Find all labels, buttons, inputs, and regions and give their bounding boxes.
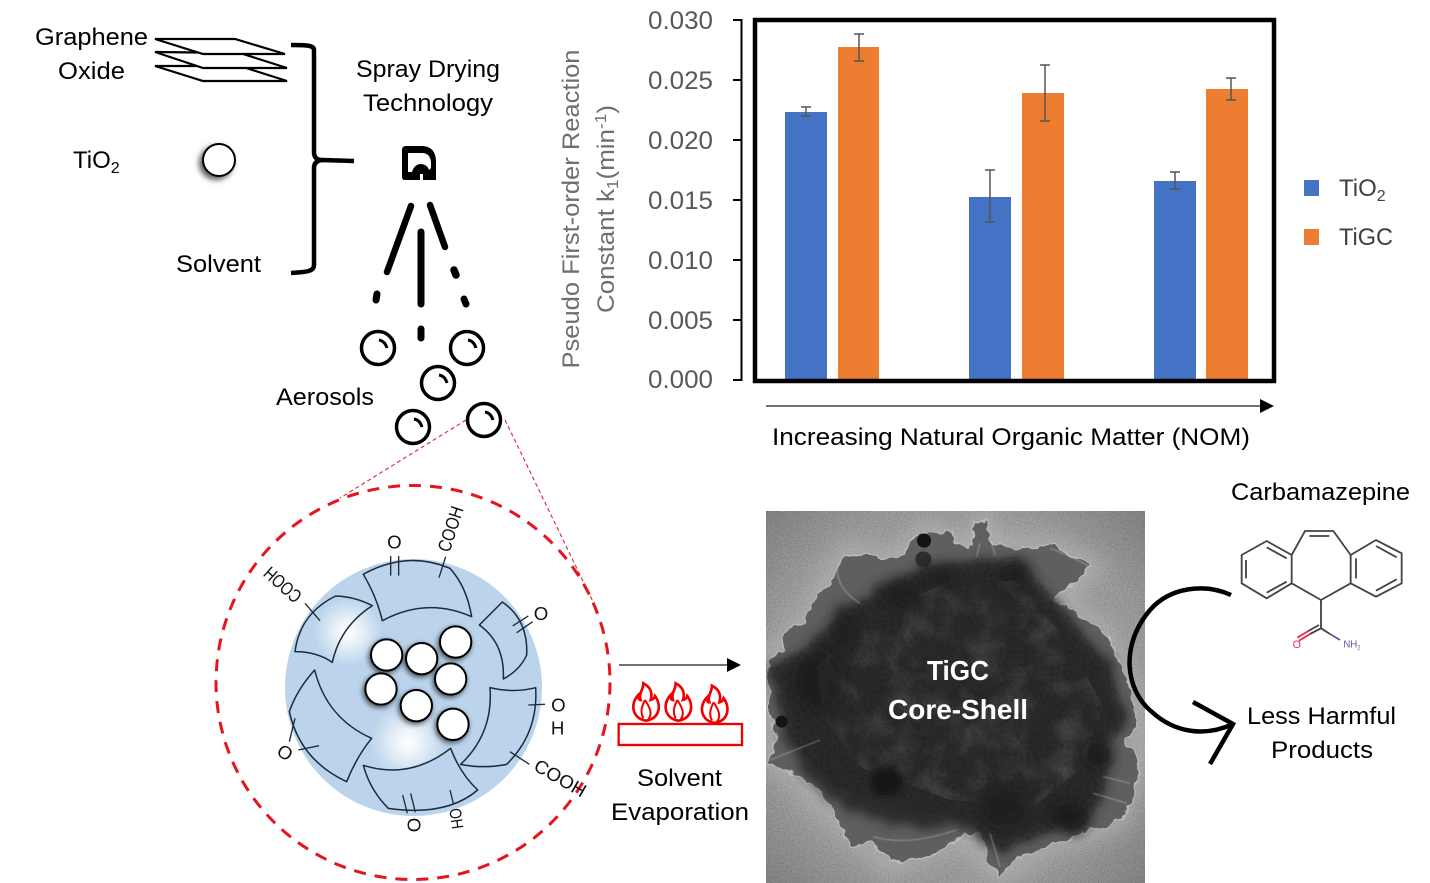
- y tick labels: 0.000: [648, 366, 713, 394]
- icon: TiO2 particle: [203, 144, 235, 176]
- micrograph: TiGC core-shell: [766, 511, 1145, 883]
- functional group labels: OH: [445, 807, 467, 830]
- heading: Spray Drying Technology: Technology: [363, 90, 493, 117]
- plot frame: [755, 20, 1274, 381]
- y tick labels: 0.030: [648, 7, 713, 35]
- thin graphene outer sheets: [768, 520, 1140, 875]
- bright halo: [768, 522, 1140, 875]
- arrow: to evaporation: [619, 658, 741, 672]
- label: Graphene Oxide: Graphene: [35, 24, 148, 51]
- y tick labels: 0.025: [648, 67, 713, 95]
- icon: flames and heater: [619, 683, 742, 745]
- y axis and ticks: [733, 20, 742, 380]
- functional group labels: COOH: [433, 504, 468, 554]
- bars TiO2: [785, 112, 1196, 380]
- legend: TiGC: [1339, 224, 1393, 251]
- icon: graphene oxide sheets: [155, 39, 287, 81]
- brace grouping inputs: [291, 45, 354, 273]
- label: Carbamazepine: Carbamazepine: [1231, 479, 1410, 506]
- label: Solvent: Solvent: [176, 251, 261, 278]
- icon: carbamazepine molecule: 2: [1357, 645, 1361, 651]
- y axis title: Constant k: [593, 198, 620, 313]
- label: TiO2: 2: [111, 160, 120, 177]
- y axis title: 1: [605, 179, 622, 189]
- label: Solvent Evaporation: Solvent: [637, 765, 722, 792]
- icon: carbamazepine molecule: O: [1293, 639, 1301, 651]
- y axis title: (min: [593, 129, 620, 179]
- label: Less Harmful Products: [1247, 703, 1396, 764]
- y axis title: Pseudo First-order Reaction: [558, 50, 585, 368]
- icon: aerosol bubbles: [362, 332, 500, 444]
- functional group labels: O: [403, 818, 424, 832]
- TiO2 core particles: [365, 626, 471, 740]
- icon: spray nozzle: [402, 146, 436, 180]
- label: Less Harmful Products: Products: [1271, 737, 1373, 764]
- label: Solvent Evaporation: Evaporation: [611, 799, 749, 826]
- label: Graphene Oxide: Oxide: [58, 58, 125, 85]
- functional group labels: O: [387, 531, 402, 552]
- y tick labels: 0.005: [648, 307, 713, 335]
- icon: carbamazepine molecule: [1242, 531, 1402, 651]
- legend: [1304, 175, 1393, 251]
- icon: carbamazepine molecule: NH: [1343, 640, 1357, 651]
- functional group labels: O: [534, 603, 548, 624]
- heading: Spray Drying Technology: [356, 56, 500, 117]
- functional group labels: O: [273, 740, 297, 765]
- y tick labels: 0.015: [648, 187, 713, 215]
- y tick labels: 0.010: [648, 247, 713, 275]
- y axis title: ): [593, 105, 620, 114]
- y tick labels: [648, 7, 713, 394]
- noise texture: [766, 511, 1145, 883]
- label: TiGC Core-Shell: Core-Shell: [888, 694, 1028, 725]
- legend: 2: [1377, 188, 1386, 205]
- label: TiGC Core-Shell: [888, 655, 1028, 725]
- lighter mottled patches: [817, 580, 1103, 807]
- label: Less Harmful Products: Less Harmful: [1247, 703, 1396, 730]
- x axis label: Increasing Natural Organic Matter (NOM): [772, 424, 1250, 451]
- y axis title: -1: [593, 114, 610, 129]
- label: Graphene Oxide: [35, 24, 148, 85]
- bright sheet folds: [770, 543, 1130, 867]
- graphene shell segments: [289, 560, 536, 810]
- bars TiGC: [838, 47, 1248, 380]
- functional group labels: [260, 504, 590, 832]
- functional group labels: COOH: [530, 755, 590, 801]
- heading: Spray Drying Technology: Spray Drying: [356, 56, 500, 83]
- dark core: [770, 557, 1127, 853]
- functional group labels: O: [551, 695, 566, 716]
- label: TiO2: TiO: [73, 147, 111, 174]
- legend: TiO: [1339, 175, 1377, 202]
- y tick labels: 0.020: [648, 127, 713, 155]
- arrow: increasing NOM: [766, 399, 1274, 413]
- label: Solvent Evaporation: [611, 765, 749, 826]
- zoom circle: particle cross-section: [216, 486, 610, 880]
- label: TiGC Core-Shell: TiGC: [927, 655, 989, 686]
- functional group labels: COOH: [260, 563, 306, 607]
- error bars: [801, 34, 1236, 222]
- core-shell particle: [260, 504, 590, 832]
- bar chart: rate constants: [558, 7, 1393, 394]
- label: Aerosols: Aerosols: [276, 384, 374, 411]
- dark nanoparticles and agglomerates: [776, 534, 1112, 830]
- fine speckle: [770, 557, 1127, 853]
- y axis title: [558, 50, 622, 368]
- icon: spray droplets: [376, 205, 466, 338]
- zoom lines: [340, 420, 598, 612]
- functional group labels: H: [551, 717, 564, 738]
- arrow: reaction cycle: [1130, 588, 1233, 764]
- functional group bonds: [289, 556, 545, 813]
